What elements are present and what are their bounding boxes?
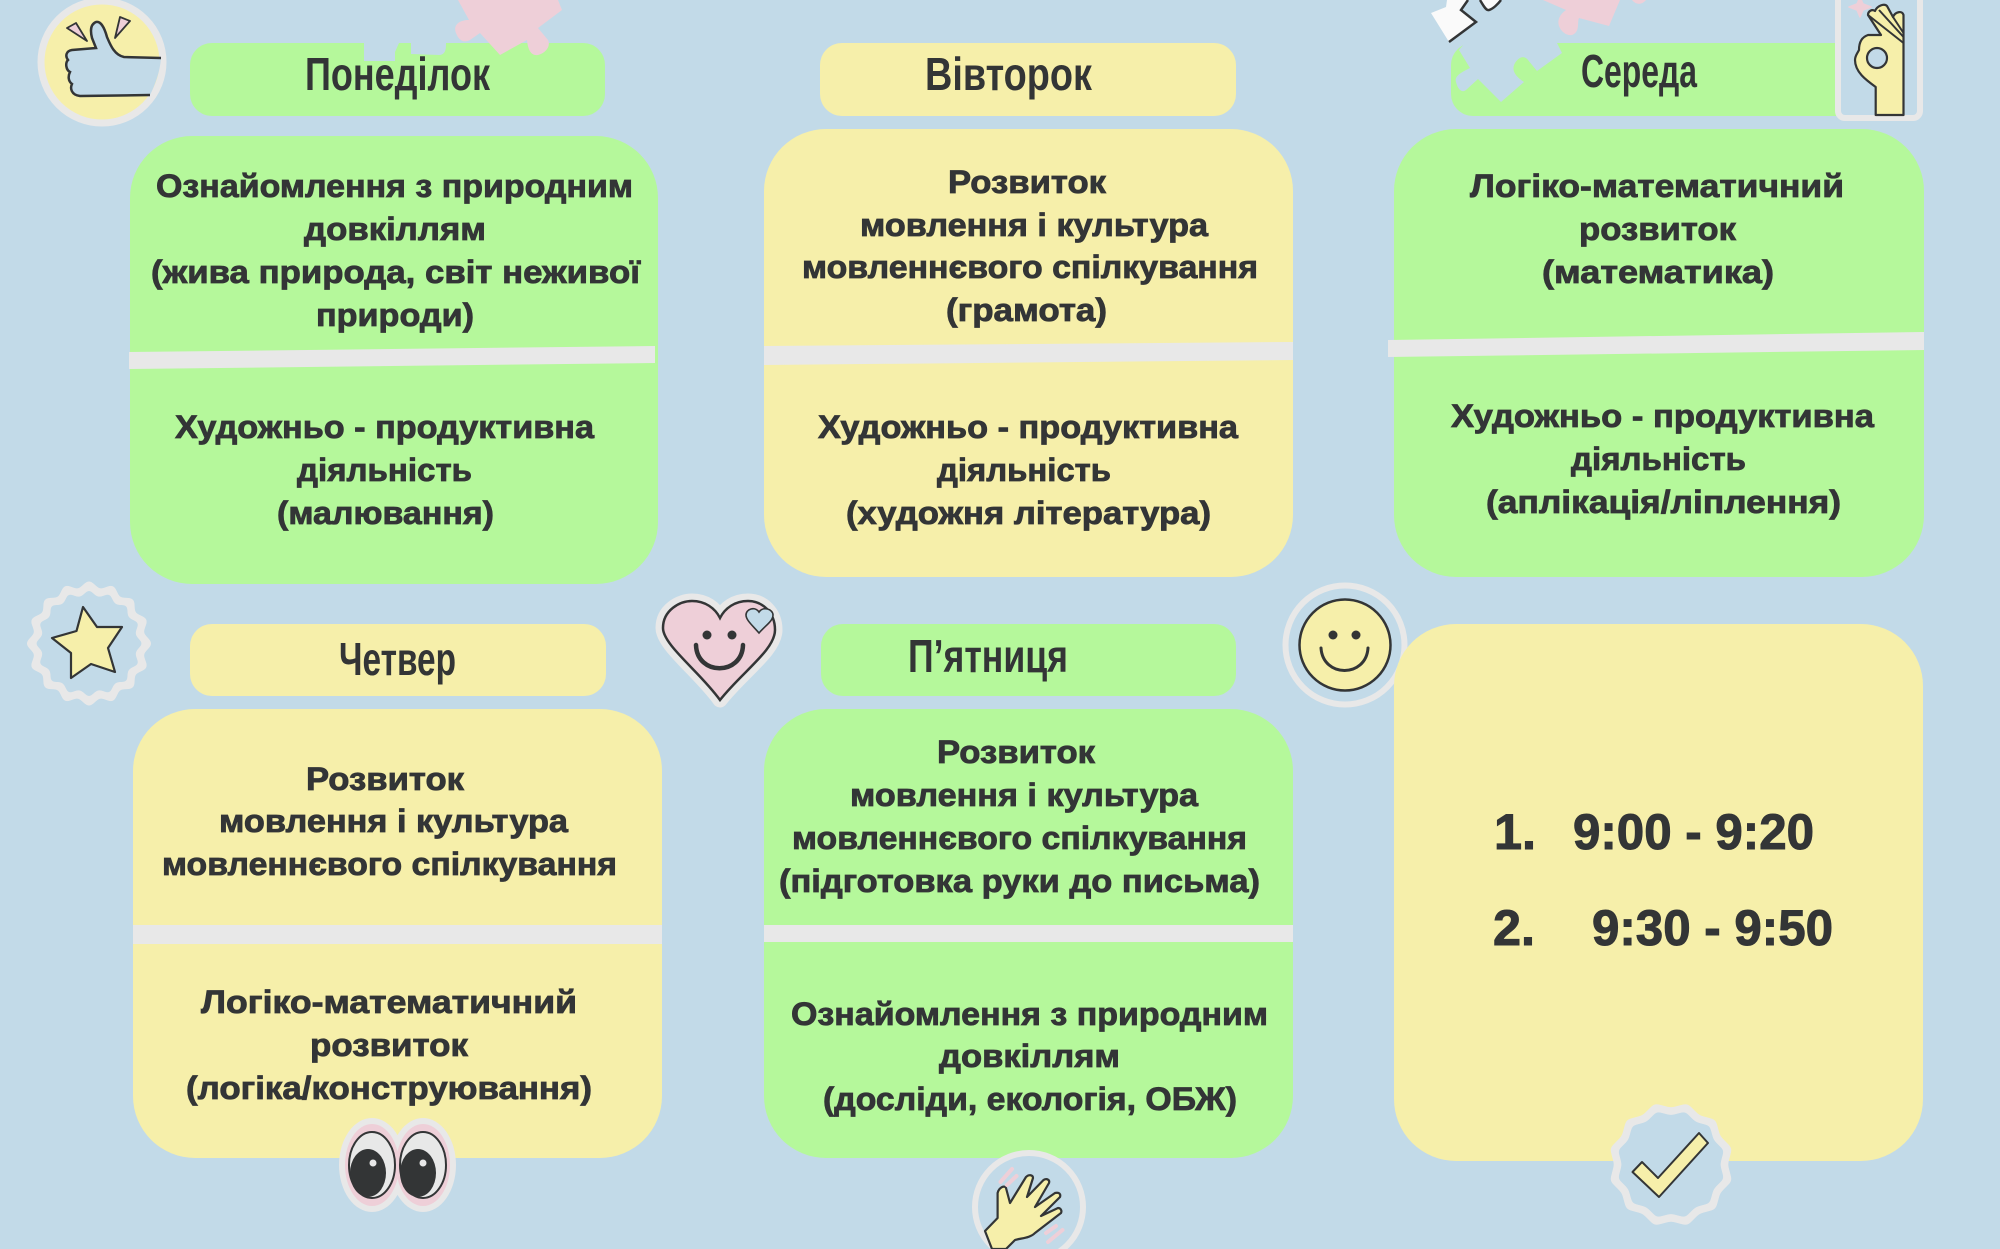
text: Wednesday first lesson bbox=[1470, 168, 1844, 290]
icon: check mark badge bbox=[1614, 1108, 1728, 1222]
text: Monday second lesson: Художньо - продуктивна bbox=[175, 409, 594, 445]
text: Tuesday first lesson bbox=[802, 164, 1258, 328]
heading pill: Середа bbox=[1451, 43, 1867, 116]
decorative puzzle pieces: Monday bbox=[364, 0, 562, 61]
text: Monday second lesson bbox=[175, 409, 594, 531]
text: Tuesday second lesson: Художньо - продуктивна bbox=[818, 409, 1238, 445]
text: Thursday second lesson bbox=[186, 984, 592, 1106]
heading pill: П’ятниця: П’ятниця bbox=[908, 630, 1068, 682]
text: Wednesday second lesson: (аплікація/ліплення) bbox=[1486, 484, 1841, 520]
icon: smiling heart bbox=[663, 601, 775, 700]
text: Wednesday first lesson: розвиток bbox=[1579, 211, 1737, 247]
text: Wednesday first lesson: (математика) bbox=[1542, 254, 1774, 290]
text: Wednesday second lesson: Художньо - продуктивна bbox=[1451, 398, 1874, 434]
text: Thursday first lesson: Розвиток bbox=[306, 761, 465, 797]
text: Monday first lesson: довкіллям bbox=[304, 211, 486, 247]
text: Friday first lesson: Розвиток bbox=[937, 734, 1096, 770]
text: Monday first lesson: природи) bbox=[316, 297, 474, 333]
panel: lesson times bbox=[1394, 624, 1923, 1161]
heading pill: Четвер: Четвер bbox=[339, 633, 456, 685]
icon: OK hand in frame bbox=[1838, 0, 1920, 118]
text: Thursday second lesson: Логіко-математичний bbox=[201, 984, 577, 1020]
panel: Monday lessons bbox=[129, 136, 658, 584]
text: Monday first lesson: (жива природа, світ неживої bbox=[151, 254, 641, 290]
heading pill: Понеділок: Понеділок bbox=[305, 48, 491, 100]
text: Thursday first lesson: мовленнєвого спілкування bbox=[162, 846, 617, 882]
text: Wednesday second lesson bbox=[1451, 398, 1874, 520]
text: Friday second lesson: довкіллям bbox=[939, 1038, 1120, 1074]
text: Monday second lesson: діяльність bbox=[297, 452, 472, 488]
panel: Thursday lessons bbox=[133, 709, 662, 1158]
text: Friday second lesson bbox=[791, 996, 1268, 1117]
panel: Wednesday lessons bbox=[1388, 129, 1924, 577]
text: Friday first lesson bbox=[779, 734, 1260, 899]
text: first time slot: 9:00 - 9:20 bbox=[1573, 804, 1814, 860]
heading pill: Вівторок bbox=[820, 43, 1236, 116]
text: Tuesday first lesson: (грамота) bbox=[946, 292, 1107, 328]
text: Monday first lesson bbox=[151, 168, 641, 333]
text: Friday first lesson: мовлення і культура bbox=[850, 777, 1198, 813]
text: Tuesday second lesson bbox=[818, 409, 1238, 531]
text: Tuesday second lesson: діяльність bbox=[937, 452, 1111, 488]
heading pill: П’ятниця bbox=[821, 624, 1236, 696]
text: Tuesday first lesson: Розвиток bbox=[948, 164, 1107, 200]
text: Thursday second lesson: розвиток bbox=[310, 1027, 469, 1063]
icon: googly eyes bbox=[339, 1118, 456, 1212]
text: Tuesday first lesson: мовленнєвого спілкування bbox=[802, 249, 1258, 285]
text: Wednesday second lesson: діяльність bbox=[1571, 441, 1746, 477]
icon: star badge bbox=[30, 584, 148, 702]
panel: Tuesday lessons bbox=[764, 129, 1293, 577]
heading pill: Вівторок: Вівторок bbox=[925, 48, 1093, 100]
text: Thursday first lesson: мовлення і культура bbox=[219, 803, 568, 839]
text: Friday first lesson: (підготовка руки до письма) bbox=[779, 863, 1260, 899]
icon: smiley face bbox=[1286, 586, 1404, 704]
heading pill: Середа: Середа bbox=[1581, 45, 1697, 97]
text: Friday second lesson: (досліди, екологія, ОБЖ) bbox=[823, 1081, 1237, 1117]
decorative puzzle pieces: Wednesday bbox=[1431, 0, 1646, 102]
text: Monday first lesson: Ознайомлення з природним bbox=[156, 168, 633, 204]
text: first time slot: 1. bbox=[1494, 804, 1536, 860]
icon: thumbs up bbox=[41, 1, 163, 123]
text: second time slot: 9:30 - 9:50 bbox=[1592, 900, 1833, 956]
text: Friday first lesson: мовленнєвого спілкування bbox=[792, 820, 1247, 856]
text: Monday second lesson: (малювання) bbox=[277, 495, 494, 531]
text: Wednesday first lesson: Логіко-математичний bbox=[1470, 168, 1844, 204]
heading pill: Четвер bbox=[190, 624, 606, 696]
heading pill: Понеділок bbox=[190, 43, 605, 116]
text: Thursday first lesson bbox=[162, 761, 617, 882]
text: Thursday second lesson: (логіка/конструювання) bbox=[186, 1070, 592, 1106]
text: Tuesday first lesson: мовлення і культура bbox=[860, 207, 1208, 243]
text: Friday second lesson: Ознайомлення з природним bbox=[791, 996, 1268, 1032]
text: Tuesday second lesson: (художня література) bbox=[846, 495, 1211, 531]
icon: waving hand bbox=[975, 1153, 1083, 1249]
panel: Friday lessons bbox=[764, 709, 1293, 1158]
text: second time slot: 2. bbox=[1493, 900, 1535, 956]
